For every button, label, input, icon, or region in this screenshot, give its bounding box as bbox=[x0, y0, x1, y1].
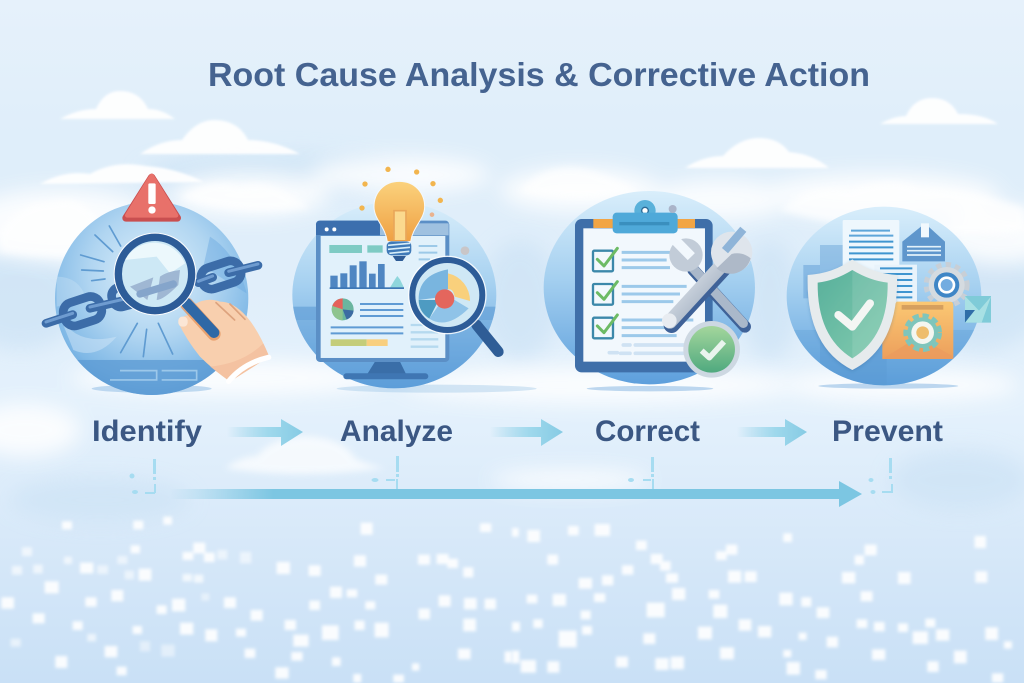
arrow: Correct to Prevent bbox=[737, 419, 807, 446]
orb bbox=[292, 202, 496, 388]
background haze bbox=[0, 153, 1024, 522]
bar chart bbox=[330, 261, 385, 288]
long timeline arrow bbox=[170, 481, 862, 507]
orb bbox=[544, 191, 755, 384]
arrow: Analyze to Correct bbox=[490, 419, 563, 446]
gear bbox=[927, 266, 966, 304]
timeline tick marks bbox=[130, 456, 893, 494]
clipboard bbox=[575, 200, 713, 372]
magnifier bbox=[408, 256, 498, 352]
orb bbox=[55, 202, 248, 395]
shield bbox=[808, 259, 897, 370]
documents bbox=[843, 220, 917, 308]
sparkles bbox=[359, 167, 443, 217]
icon: clipboard checklist and wrenches (Correct) bbox=[544, 191, 755, 391]
step label: Identify: Identify bbox=[92, 415, 202, 448]
icon: broken chain under magnifier (Identify) bbox=[46, 176, 269, 397]
title: Root Cause Analysis & Corrective Action bbox=[208, 56, 870, 93]
icon: shield, documents, folder and gears (Prevent) bbox=[785, 207, 991, 389]
warning triangle bbox=[126, 176, 177, 218]
light bulb bbox=[374, 181, 425, 261]
pie chart bbox=[332, 298, 354, 320]
arrow: Identify to Analyze bbox=[227, 419, 303, 446]
floppy disk bbox=[902, 223, 945, 261]
checklist rows bbox=[593, 251, 613, 338]
orb bbox=[787, 207, 981, 385]
step label: Analyze: Analyze bbox=[340, 415, 453, 448]
light rays bbox=[81, 226, 173, 357]
icon: dashboard, light bulb and magnifier (Analyze) bbox=[290, 167, 537, 393]
check badge bbox=[683, 321, 740, 378]
bottom confetti squares bbox=[1, 517, 512, 683]
step label: Correct: Correct bbox=[595, 415, 700, 448]
hand bbox=[178, 300, 269, 382]
monitor bbox=[316, 221, 449, 379]
wrenches bbox=[662, 229, 752, 328]
paper plane bbox=[965, 296, 991, 323]
chain bbox=[46, 258, 258, 329]
magnifier bbox=[114, 233, 214, 334]
step label: Prevent: Prevent bbox=[832, 415, 943, 448]
folder bbox=[882, 302, 953, 359]
background clouds bbox=[0, 91, 1024, 490]
